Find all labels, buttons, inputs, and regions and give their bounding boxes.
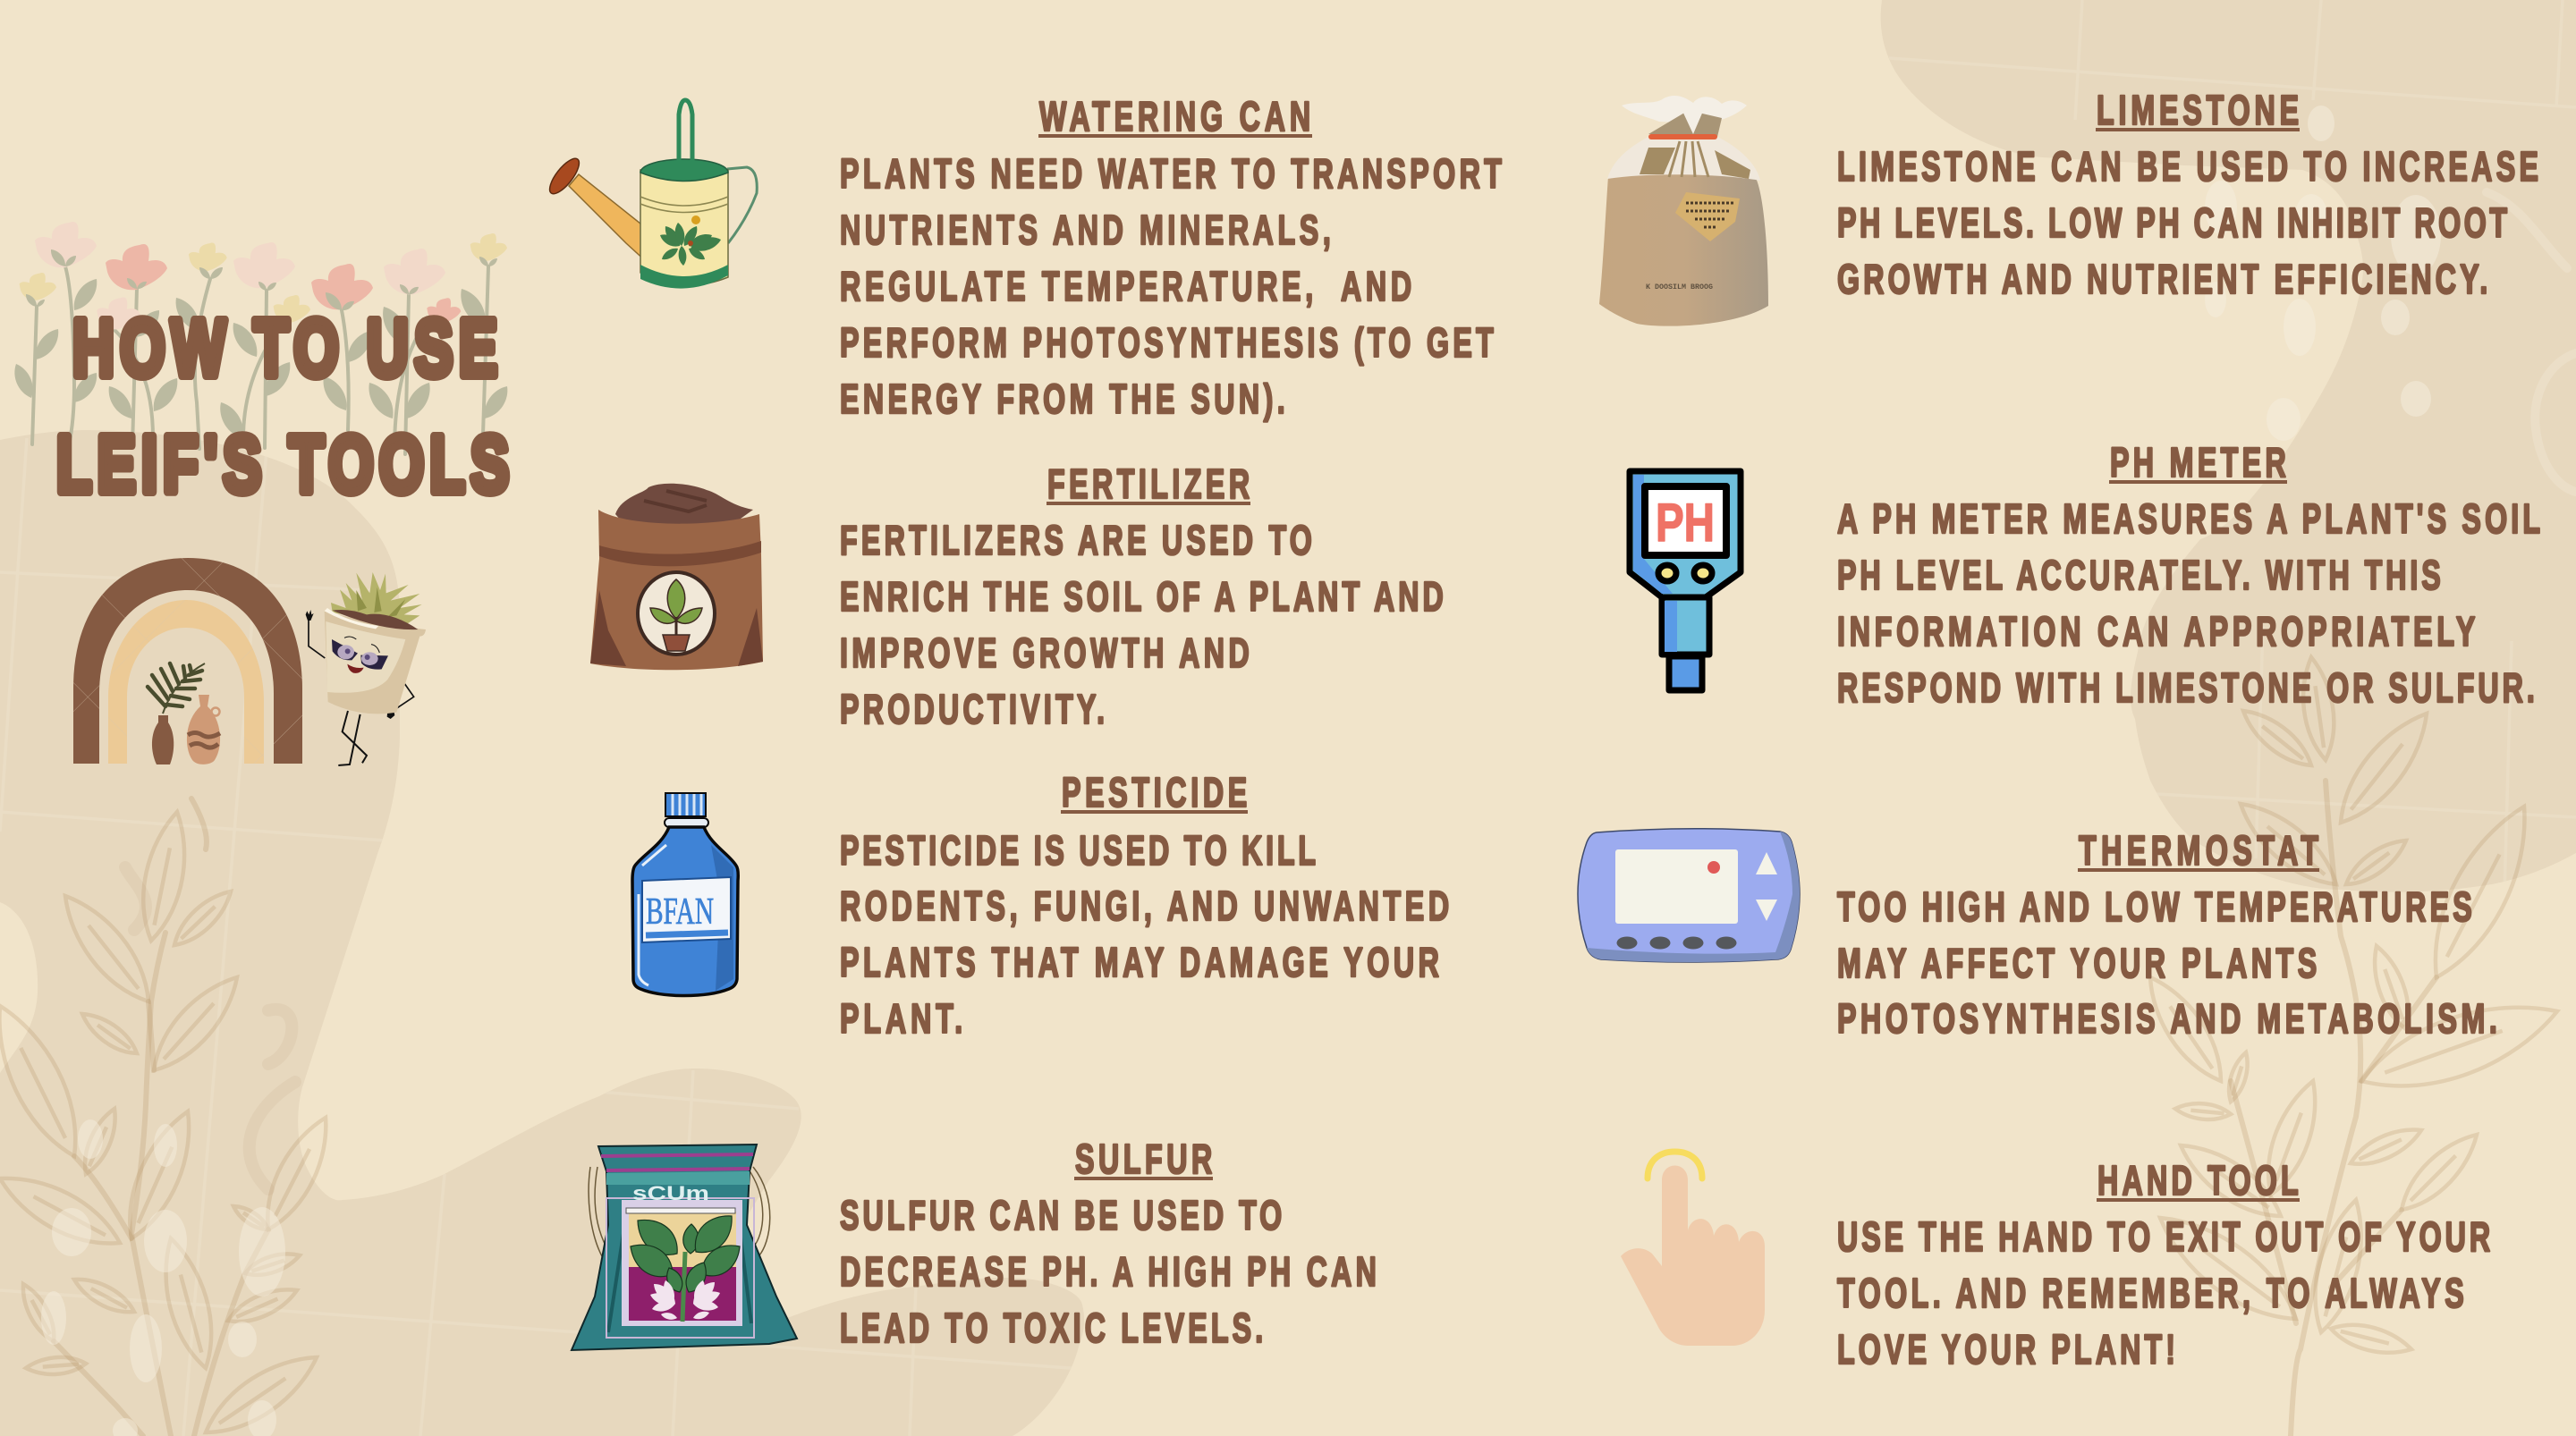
background blob: left <box>0 429 1084 1436</box>
text block: pH meter: INFORMATION CAN APPROPRIATELY <box>1837 609 2475 655</box>
text block: watering can: PERFORM PHOTOSYNTHESIS (TO GET <box>840 320 1494 366</box>
heading: watering can: WATERING CAN <box>1039 94 1310 139</box>
icon: fertilizer bag <box>590 484 763 670</box>
text block: watering can <box>840 94 1502 422</box>
icon: limestone sack: K DOOSILM BROOG <box>1646 283 1713 291</box>
text block: pesticide: PESTICIDE IS USED TO KILL <box>840 828 1316 874</box>
text block: hand tool: TOOL. AND REMEMBER, TO ALWAYS <box>1837 1271 2464 1316</box>
heading: limestone: LIMESTONE <box>2097 88 2299 133</box>
text block: sulfur <box>840 1136 1377 1351</box>
pot mascot character <box>306 572 426 765</box>
icon: fern in small vase <box>148 663 205 764</box>
text block: hand tool: USE THE HAND TO EXIT OUT OF YOUR <box>1837 1214 2490 1260</box>
text block: watering can: PLANTS NEED WATER TO TRANSPORT <box>840 151 1502 197</box>
heading: sulfur: SULFUR <box>1075 1136 1212 1182</box>
text block: pesticide: RODENTS, FUNGI, AND UNWANTED <box>840 883 1449 929</box>
text block: hand tool: LOVE YOUR PLANT! <box>1837 1327 2175 1373</box>
text block: fertilizer: IMPROVE GROWTH AND <box>840 630 1250 676</box>
text block: pH meter <box>1837 440 2540 711</box>
text block: sulfur: SULFUR CAN BE USED TO <box>840 1193 1282 1238</box>
text block: limestone: GROWTH AND NUTRIENT EFFICIENCY. <box>1837 257 2487 302</box>
icon: pesticide bottle <box>632 793 738 996</box>
heading: hand tool: HAND TOOL <box>2097 1158 2299 1204</box>
title: HOW TO USE <box>72 303 497 393</box>
heading: thermostat: THERMOSTAT <box>2079 828 2318 874</box>
text block: pesticide <box>840 770 1449 1042</box>
heading: pH meter: PH METER <box>2110 440 2286 486</box>
text block: thermostat: PHOTOSYNTHESIS AND METABOLISM. <box>1837 996 2497 1042</box>
text block: thermostat: MAY AFFECT YOUR PLANTS <box>1837 941 2317 986</box>
background blob: right <box>1881 0 2576 894</box>
icon: pesticide bottle: BFAN <box>646 891 714 933</box>
heading: pesticide: PESTICIDE <box>1062 770 1247 815</box>
heading: fertilizer: FERTILIZER <box>1047 461 1250 507</box>
rainbow arch with plants <box>73 558 302 764</box>
text block: fertilizer <box>840 461 1444 732</box>
text block: pH meter: PH LEVEL ACCURATELY. WITH THIS <box>1837 553 2441 598</box>
icon: pH meter <box>1630 471 1741 690</box>
text block: fertilizer: ENRICH THE SOIL OF A PLANT AND <box>840 574 1444 620</box>
text block: limestone: PH LEVELS. LOW PH CAN INHIBIT ROOT <box>1837 200 2507 246</box>
icon: sulfur bag: sCUm <box>632 1182 709 1204</box>
text block: watering can: NUTRIENTS AND MINERALS, <box>840 207 1331 253</box>
icon: sulfur bag <box>572 1145 797 1350</box>
title: LEIF'S TOOLS <box>56 419 509 510</box>
text block: hand tool <box>1837 1158 2490 1373</box>
text block: sulfur: LEAD TO TOXIC LEVELS. <box>840 1305 1263 1351</box>
title <box>56 303 509 510</box>
flower garden behind title <box>10 222 513 454</box>
text block: thermostat: TOO HIGH AND LOW TEMPERATURES <box>1837 884 2472 930</box>
icon: terracotta vase <box>187 695 220 764</box>
text block: pH meter: A PH METER MEASURES A PLANT'S SOIL <box>1837 496 2540 542</box>
text block: fertilizer: PRODUCTIVITY. <box>840 687 1105 732</box>
text block: watering can: REGULATE TEMPERATURE, AND <box>840 264 1411 309</box>
decorative branches <box>0 655 2567 1436</box>
text block: pH meter: RESPOND WITH LIMESTONE OR SULFUR. <box>1837 665 2535 711</box>
text block: watering can: ENERGY FROM THE SUN). <box>840 376 1285 422</box>
text block: thermostat <box>1837 828 2497 1042</box>
icon: pH meter: PH <box>1656 493 1715 553</box>
text block: sulfur: DECREASE PH. A HIGH PH CAN <box>840 1249 1377 1295</box>
icon: limestone sack <box>1599 96 1768 326</box>
icon: pointing hand <box>1621 1152 1765 1346</box>
text block: pesticide: PLANT. <box>840 996 962 1042</box>
text block: limestone: LIMESTONE CAN BE USED TO INCREASE <box>1837 144 2538 190</box>
text block: limestone <box>1837 88 2538 302</box>
text block: fertilizer: FERTILIZERS ARE USED TO <box>840 518 1312 563</box>
icon: thermostat <box>1578 829 1800 962</box>
icon: watering can <box>545 100 757 289</box>
text block: pesticide: PLANTS THAT MAY DAMAGE YOUR <box>840 940 1439 985</box>
